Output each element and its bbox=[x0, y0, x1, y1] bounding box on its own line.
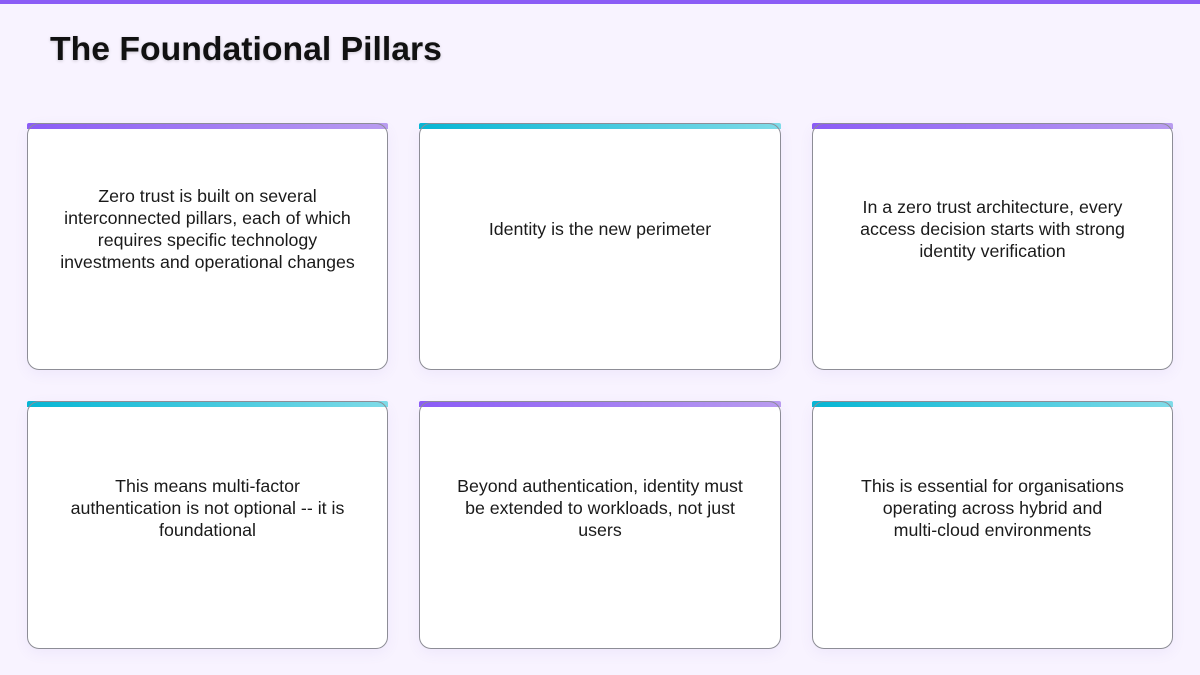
card: identity verification bbox=[812, 123, 1173, 370]
card: multi-factor authentication: authentication is not optional -- it is bbox=[71, 498, 344, 518]
card: hybrid and multi-cloud bbox=[812, 401, 1173, 649]
card: interconnected pillars: interconnected pillars, each of which bbox=[64, 208, 351, 228]
card: multi-factor authentication: This means multi-factor bbox=[115, 476, 300, 496]
card: identity verification: identity verification bbox=[919, 240, 1066, 260]
card: multi-factor authentication: foundational bbox=[159, 520, 256, 540]
card: interconnected pillars: investments and operational changes bbox=[60, 252, 355, 272]
card: interconnected pillars: requires specific technology bbox=[98, 230, 317, 250]
card: workload identity bbox=[419, 401, 781, 649]
card: identity perimeter bbox=[419, 123, 781, 370]
card: interconnected pillars bbox=[27, 123, 388, 370]
card: workload identity: Beyond authentication, identity must bbox=[457, 476, 743, 496]
card: interconnected pillars: Zero trust is built on several bbox=[98, 186, 317, 206]
card: identity verification: In a zero trust architecture, every bbox=[863, 196, 1122, 216]
card: hybrid and multi-cloud: operating across hybrid and bbox=[883, 498, 1102, 518]
card: identity verification: access decision starts with strong bbox=[860, 218, 1125, 238]
card: multi-factor authentication bbox=[27, 401, 388, 649]
card: workload identity: be extended to workloads, not just bbox=[465, 498, 735, 518]
card: hybrid and multi-cloud: This is essential for organisations bbox=[861, 476, 1124, 496]
title: The Foundational Pillars bbox=[50, 30, 442, 68]
top accent bar bbox=[0, 0, 1200, 4]
card: identity perimeter: Identity is the new perimeter bbox=[489, 218, 711, 238]
card: hybrid and multi-cloud: multi-cloud environments bbox=[894, 520, 1091, 540]
card: workload identity: users bbox=[578, 520, 622, 540]
